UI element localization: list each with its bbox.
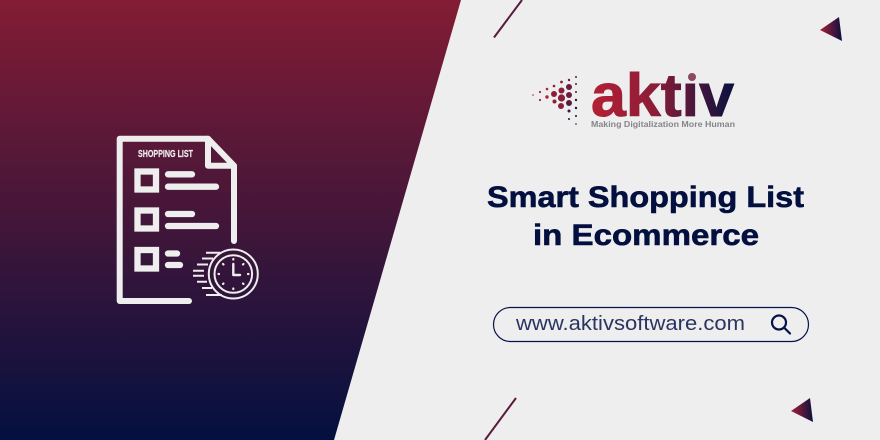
logo dot accent bbox=[688, 73, 696, 81]
icon: magnifier bbox=[772, 316, 790, 334]
icon: list lines bbox=[168, 174, 216, 265]
icon: shopping list with clock bbox=[120, 139, 258, 301]
icon: checkbox 1 bbox=[138, 172, 156, 190]
title line 2: in Ecommerce bbox=[533, 219, 759, 252]
diagonal gradient panel bbox=[0, 0, 461, 440]
search bar outline bbox=[494, 308, 808, 342]
website url: www.aktivsoftware.com bbox=[515, 313, 745, 335]
logo mark: dots bbox=[532, 76, 577, 125]
title line 1: Smart Shopping List bbox=[487, 181, 804, 214]
decorative line: top bbox=[494, 0, 522, 38]
title bbox=[487, 181, 804, 252]
icon label: SHOPPING LIST bbox=[138, 148, 193, 160]
icon: checkbox 2 bbox=[138, 210, 156, 228]
logo i-dot cover bbox=[685, 69, 699, 82]
logo tagline: Making Digitalization More Human bbox=[591, 119, 735, 129]
logo bbox=[532, 62, 735, 129]
icon: clock bbox=[209, 250, 258, 298]
decorative triangle: bottom bbox=[791, 398, 813, 422]
decorative line: bottom bbox=[485, 398, 516, 440]
icon: folded corner bbox=[208, 139, 234, 166]
icon: speed lines bbox=[193, 253, 222, 295]
logo wordmark: aktiv bbox=[591, 62, 735, 129]
decorative triangle: top bbox=[820, 17, 842, 41]
search bar bbox=[494, 308, 808, 342]
icon: checkbox 3 bbox=[138, 250, 156, 268]
icon: document outline bbox=[120, 139, 234, 301]
